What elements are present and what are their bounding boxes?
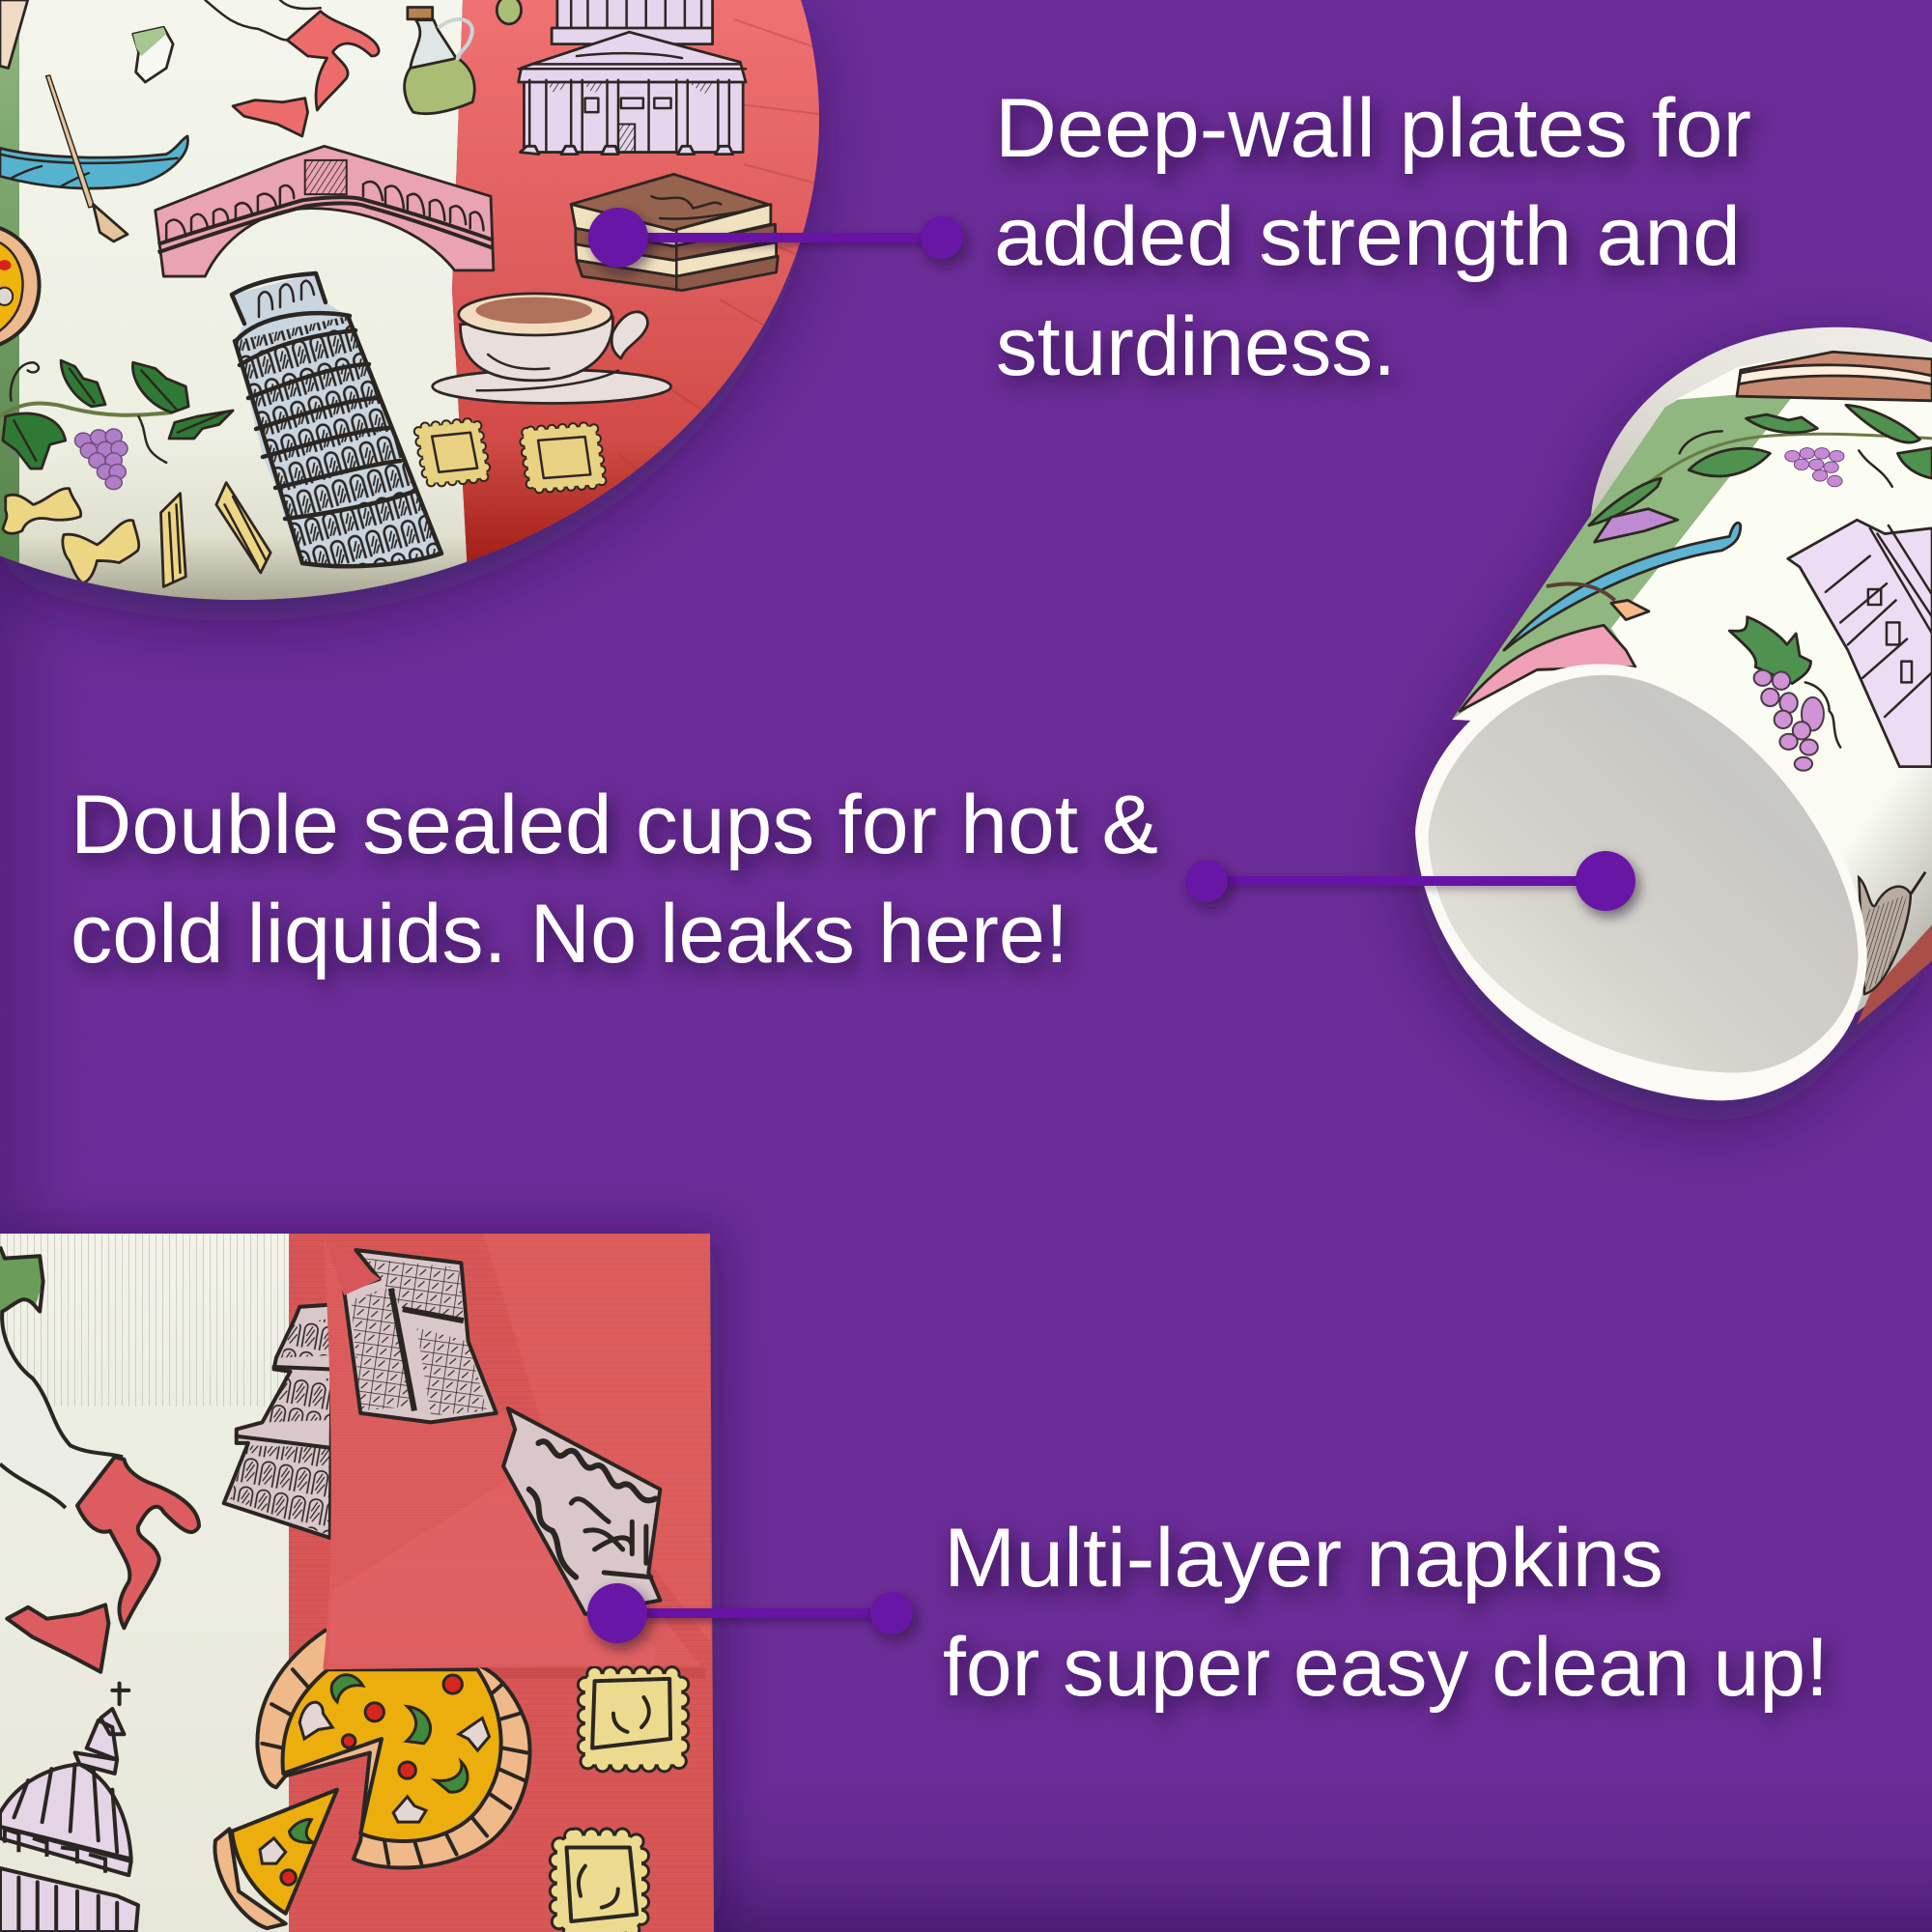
text block: double sealed cups: cold liquids. No leaks here!: [71, 888, 1068, 980]
icon: lilac capitol building: [519, 0, 746, 155]
panel: paper napkin: [0, 1233, 719, 1932]
icon: cup lilac building: [1788, 520, 1932, 767]
icon: cup grape vine: [1589, 405, 1932, 542]
icon: coffee cup: [433, 294, 671, 404]
icon: grape vine: [0, 360, 233, 490]
icon: napkin folded corner flap: [323, 1236, 700, 1669]
icon: cup dome: [1859, 872, 1925, 994]
text block: multi-layer napkins: for super easy clean up!: [943, 1621, 1829, 1714]
icon: oil bottle: [405, 0, 522, 114]
icon: pizza slice at plate edge: [0, 226, 40, 347]
icon: cup gondola: [1504, 523, 1741, 650]
cup top rim: [1591, 327, 1932, 523]
cup body: [1452, 356, 1932, 1025]
callout: napkin pointer: [587, 1583, 913, 1643]
icon: corner building: [0, 0, 28, 68]
panel: paper cup: [1415, 327, 1932, 1100]
icon: gondola with oar: [0, 75, 187, 242]
text block: deep-wall plates: sturdiness.: [996, 300, 1396, 393]
icon: map of Italy: [133, 0, 379, 136]
text block: multi-layer napkins: Multi-layer napkins: [944, 1512, 1663, 1605]
icon: leaning tower of Pisa: [232, 273, 441, 567]
icon: cup grapes: [1729, 617, 1840, 771]
text block: deep-wall plates: [994, 82, 1751, 393]
icon: cup pink bridge: [1460, 625, 1635, 711]
icon: napkin dome: [0, 1684, 138, 1932]
panel: paper plate: [0, 0, 831, 609]
text block: double sealed cups: [71, 779, 1158, 980]
icon: wafer top pattern: [1737, 352, 1932, 401]
cup open end: [1415, 664, 1867, 1100]
icon: tiramisu slice: [571, 174, 778, 291]
icon: napkin ravioli pair: [557, 1674, 681, 1932]
icon: ravioli pair: [417, 422, 603, 489]
callout: plate pointer: [588, 208, 963, 268]
napkin tricolour base: [0, 1233, 719, 1932]
icon: napkin pizza: [214, 1631, 530, 1928]
icon: farfalle and penne pasta: [3, 483, 270, 586]
text block: multi-layer napkins: [943, 1512, 1829, 1714]
text block: deep-wall plates: Deep-wall plates for: [995, 82, 1751, 175]
text block: deep-wall plates: added strength and: [994, 190, 1741, 283]
plate tricolour base: [0, 0, 831, 609]
icon: Rialto bridge: [156, 146, 494, 276]
text block: double sealed cups: Double sealed cups for hot &: [71, 779, 1158, 871]
icon: napkin map of Italy: [0, 1247, 199, 1672]
callout: cup pointer: [1185, 851, 1635, 911]
icon: napkin tower: [224, 1304, 332, 1538]
